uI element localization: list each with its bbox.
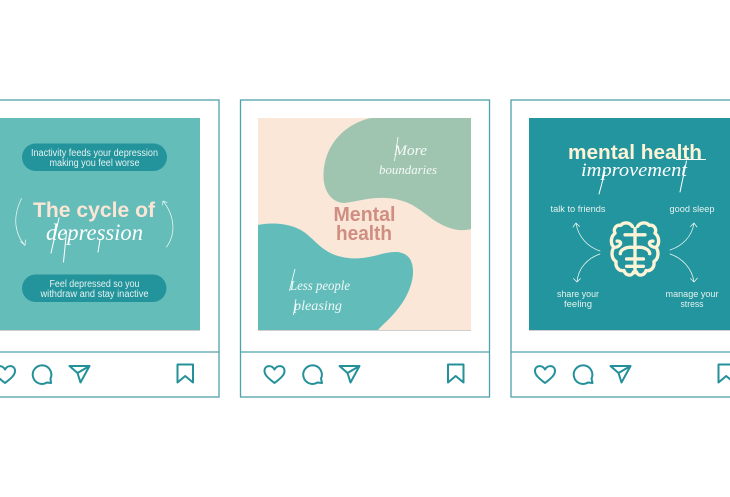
icon: send [340,366,360,382]
icon: send [70,366,90,382]
script: less people pleasing: pleasing [293,299,342,314]
callout: inactivity [22,144,167,171]
post frame [511,100,730,397]
icon: bookmark [718,364,730,382]
heading: improvement script [581,160,688,194]
callout: inactivity: Inactivity feeds your depression [31,148,158,159]
label: share your feeling: share your [557,289,600,300]
heading: depression script [46,218,143,262]
panel: cycle of depression post [0,100,219,397]
post frame [240,100,490,397]
heading: mental health: mental health [568,141,702,164]
icon: send [610,366,630,382]
label: good sleep: good sleep [670,204,714,215]
post image background [258,118,471,331]
icon: comment [303,365,322,384]
blob: sage [323,118,471,230]
panel: mental health post [240,100,490,397]
icon: comment [33,365,51,384]
heading: mental health: Mental [334,204,396,226]
arrow: manage your stress [670,254,698,282]
callout: inactivity: making you feel worse [50,158,140,169]
arrow: share your feeling [574,254,600,282]
icon: heart [264,366,284,383]
arrow: talk to friends [573,223,600,251]
script: more boundaries [379,137,437,177]
post image background [0,118,200,331]
label: manage your stress: manage your [666,289,719,300]
icon: heart [535,366,555,383]
heading: improvement script: improvement [581,160,688,181]
script: less people pleasing [289,269,350,315]
label: share your feeling [557,289,600,310]
script: less people pleasing: Less people [289,279,350,294]
icon: brain [611,223,659,275]
heading: depression script: depression [46,220,143,245]
heading: mental health: health [336,223,392,245]
script: more boundaries: boundaries [379,163,437,177]
icon: heart [0,366,15,383]
callout: feel depressed: withdraw and stay inactive [40,289,149,300]
callout: feel depressed [22,274,166,302]
panel: mental health improvement post [511,100,730,397]
post frame [0,100,219,397]
icon: bookmark [178,364,193,382]
label: manage your stress: stress [680,299,704,310]
post image background [529,118,730,331]
script: more boundaries: More [393,143,427,159]
callout: feel depressed: Feel depressed so you [50,279,140,290]
label: manage your stress [666,289,719,310]
icon: bookmark [448,364,464,382]
arrow: right curve [162,201,173,247]
heading: mental health [334,204,396,245]
arrow: left curve [16,198,26,246]
label: share your feeling: feeling [564,299,592,310]
icon: comment [574,365,592,384]
heading: the cycle of: The cycle of [33,198,156,222]
arrow: good sleep [670,223,697,250]
label: talk to friends: talk to friends [550,204,606,215]
blob: teal [258,223,413,330]
